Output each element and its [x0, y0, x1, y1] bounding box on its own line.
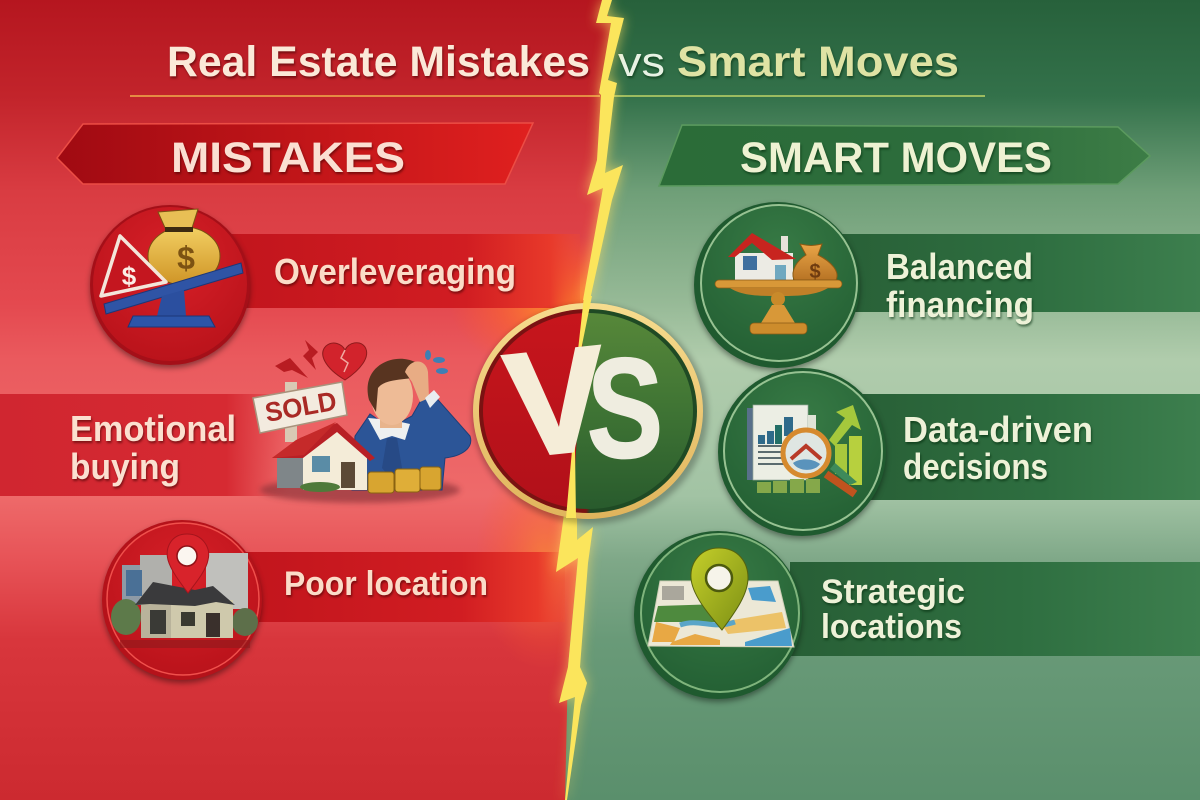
row: poor location: [102, 520, 565, 680]
row: strategic locations: [634, 531, 1200, 699]
banner: mistakes: [57, 123, 533, 184]
dark inner ring: [479, 309, 697, 513]
bar: [850, 394, 1200, 500]
bar: [220, 552, 565, 622]
row: balanced financing: [694, 202, 1200, 368]
icon: warning sign and money bag on a seesaw: $: [122, 261, 137, 291]
banner: mistakes: MISTAKES: [171, 134, 405, 182]
bar: [790, 562, 1200, 656]
lightning glow lower: [556, 500, 593, 800]
title underline right: [610, 95, 985, 97]
row: balanced financing: financing: [886, 284, 1034, 325]
VS badge: [470, 296, 710, 524]
glow: orange above VS badge: [450, 235, 670, 375]
bolt through badge: [566, 296, 592, 518]
glow: orange below VS badge: [475, 450, 615, 670]
row: data-driven decisions: [718, 368, 1200, 536]
icon: house and money bag on balance: $: [809, 261, 821, 283]
lightning divider: lower: [556, 500, 593, 800]
banner: smart moves: SMART MOVES: [740, 134, 1052, 182]
icon: stressed man with sold house: SOLD: [263, 386, 339, 428]
background: green right side: [565, 0, 1200, 800]
row: overleveraging: [90, 205, 580, 365]
icon: charts with magnifying glass: [718, 368, 886, 536]
label: Overleveraging: [274, 251, 516, 292]
banner: smart moves: [659, 125, 1150, 186]
label: Emotional: [70, 408, 236, 449]
title underline left: [130, 95, 600, 97]
icon: map with pin: [634, 531, 802, 699]
red half: [483, 313, 582, 507]
bar: [820, 234, 1200, 312]
icon: stressed man with sold house: [253, 340, 471, 503]
S letter: S: [587, 329, 663, 488]
lightning divider: upper: [583, 0, 624, 300]
row: strategic locations: locations: [821, 608, 962, 646]
green half: [575, 313, 693, 509]
bar: [0, 394, 290, 496]
title: [167, 38, 959, 86]
icon: run-down house with map pin: [102, 520, 262, 680]
label: Poor location: [284, 565, 488, 603]
icon: warning sign and money bag on a seesaw: [90, 205, 250, 365]
title: mistakes part: Real Estate Mistakes: [167, 38, 590, 86]
label: Balanced: [886, 246, 1033, 287]
bar: [200, 234, 580, 308]
lightning glow: [583, 0, 624, 300]
row: emotional buying: buying: [70, 446, 180, 487]
label: Strategic: [821, 573, 965, 611]
row: emotional buying: [0, 340, 471, 503]
label: Data-driven: [903, 409, 1093, 450]
V letter: V: [499, 315, 613, 488]
title: vs part: vs: [618, 38, 665, 85]
row: data-driven decisions: decisions: [903, 446, 1048, 487]
shadow: [472, 304, 708, 524]
icon: warning sign and money bag on a seesaw: $: [177, 240, 195, 276]
icon: house and money bag on balance: [694, 202, 860, 368]
title: smart moves part: Smart Moves: [677, 38, 959, 86]
gold ring: [473, 303, 703, 519]
background: red left side: [0, 0, 620, 800]
